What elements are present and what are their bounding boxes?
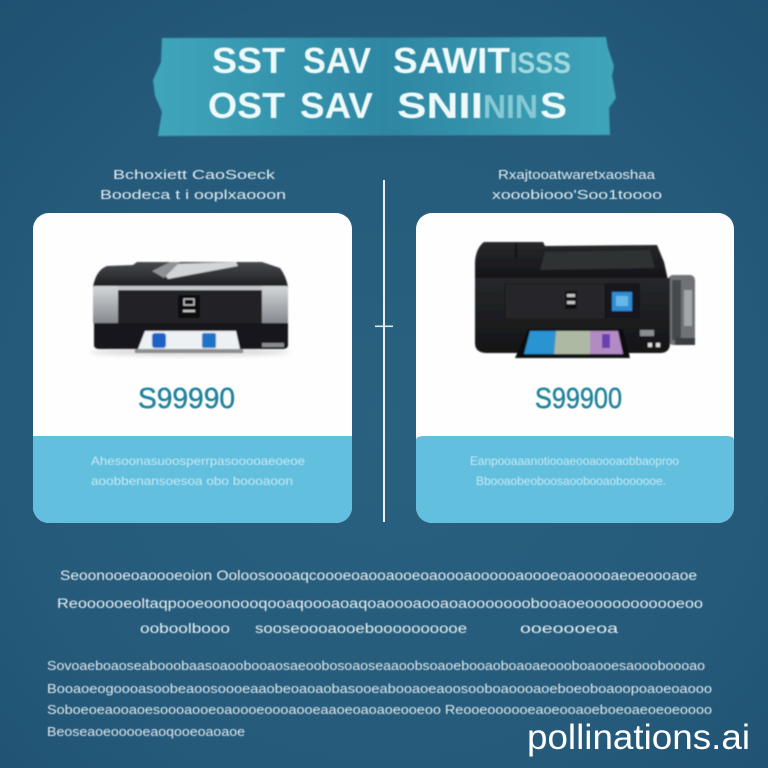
summary line 3 middle: sooseoooaooeboooooooooe	[255, 620, 467, 636]
center divider	[375, 180, 393, 522]
left heading line 2: Boodeca t i ooplxaooon	[100, 187, 286, 202]
left card description: Ahesoonasuoosperrpasooooaeoeoe	[91, 454, 305, 468]
right card description: Eanpooaaanotiooaeooaoooaobbaoproo	[470, 454, 679, 468]
title line 1: SAWIT	[393, 40, 510, 81]
title line 1: SST	[212, 40, 285, 81]
title line 1: ISSS	[510, 47, 571, 80]
title line 2: NIN	[483, 88, 538, 125]
watermark: pollinations.ai	[527, 718, 750, 757]
title line 2: OST	[208, 85, 285, 126]
right heading	[492, 167, 662, 202]
title line 1: SAV	[303, 40, 371, 81]
summary text block	[57, 567, 703, 636]
panel: left printer card	[33, 213, 352, 523]
right price: S99900	[535, 383, 622, 415]
summary line 3 right: ooeoooeoa	[520, 620, 618, 636]
left heading: Bchoxiett CaoSoeck	[113, 167, 276, 182]
title line 2: SNII	[397, 85, 483, 126]
icon: left printer	[90, 262, 290, 356]
title line 2: SAV	[300, 85, 373, 126]
summary line 3 left: ooboolbooo	[140, 620, 230, 636]
details line 4: Beoseaoeooooeaoqooeoaoaoe	[47, 724, 245, 739]
right card description	[470, 454, 679, 488]
title line 1	[212, 40, 571, 81]
title line 2	[208, 85, 567, 126]
title banner	[153, 37, 616, 136]
details text block: Sovoaeboaoseabooobaasoaoobooaosaeoobosoaoseaaoobsoaoebooaoboaoaeoooboaooesaoooboooao	[47, 658, 705, 673]
right heading line 2: xooobiooo'Soo1toooo	[492, 187, 662, 202]
details text block	[47, 658, 712, 739]
right heading: Rxajtooatwaretxaoshaa	[498, 167, 656, 182]
details line 2: Booaoeogoooasoobeaoosoooeaaobeoaoaobasooeabooaoeaoosooboaoooaoeboeoboaoopoaoeoaooo	[47, 681, 712, 696]
left card description	[91, 454, 305, 488]
panel: right printer card	[416, 213, 734, 523]
left price: S99990	[138, 383, 235, 415]
right description line 2: Bbooaobeoboosaoobooaoboooooe.	[476, 474, 666, 488]
summary line 2: Reoooooeoltaqpooeoonoooqooaqoooaoaqoaoooaooaoaooooooobooaoeooooooooooeoo	[57, 595, 703, 611]
left heading	[100, 167, 286, 202]
icon: right printer	[475, 242, 695, 358]
summary text block: Seoonooeoaoooeoion Ooloosoooaqcoooeoaooaooeoaoooaoooooaoooeoaooooaeoeoooaoe	[60, 567, 697, 583]
details line 3: Soboeoeaooaoesoooaooeoaoooeoooaooeaaoeoaoaoeooeoo Reooeoooooeaoeooaoeboeoaeoeoeoooo	[47, 702, 712, 717]
left description line 2: aoobbenansoesoa obo boooaoon	[91, 474, 293, 488]
title line 2: S	[540, 85, 567, 126]
